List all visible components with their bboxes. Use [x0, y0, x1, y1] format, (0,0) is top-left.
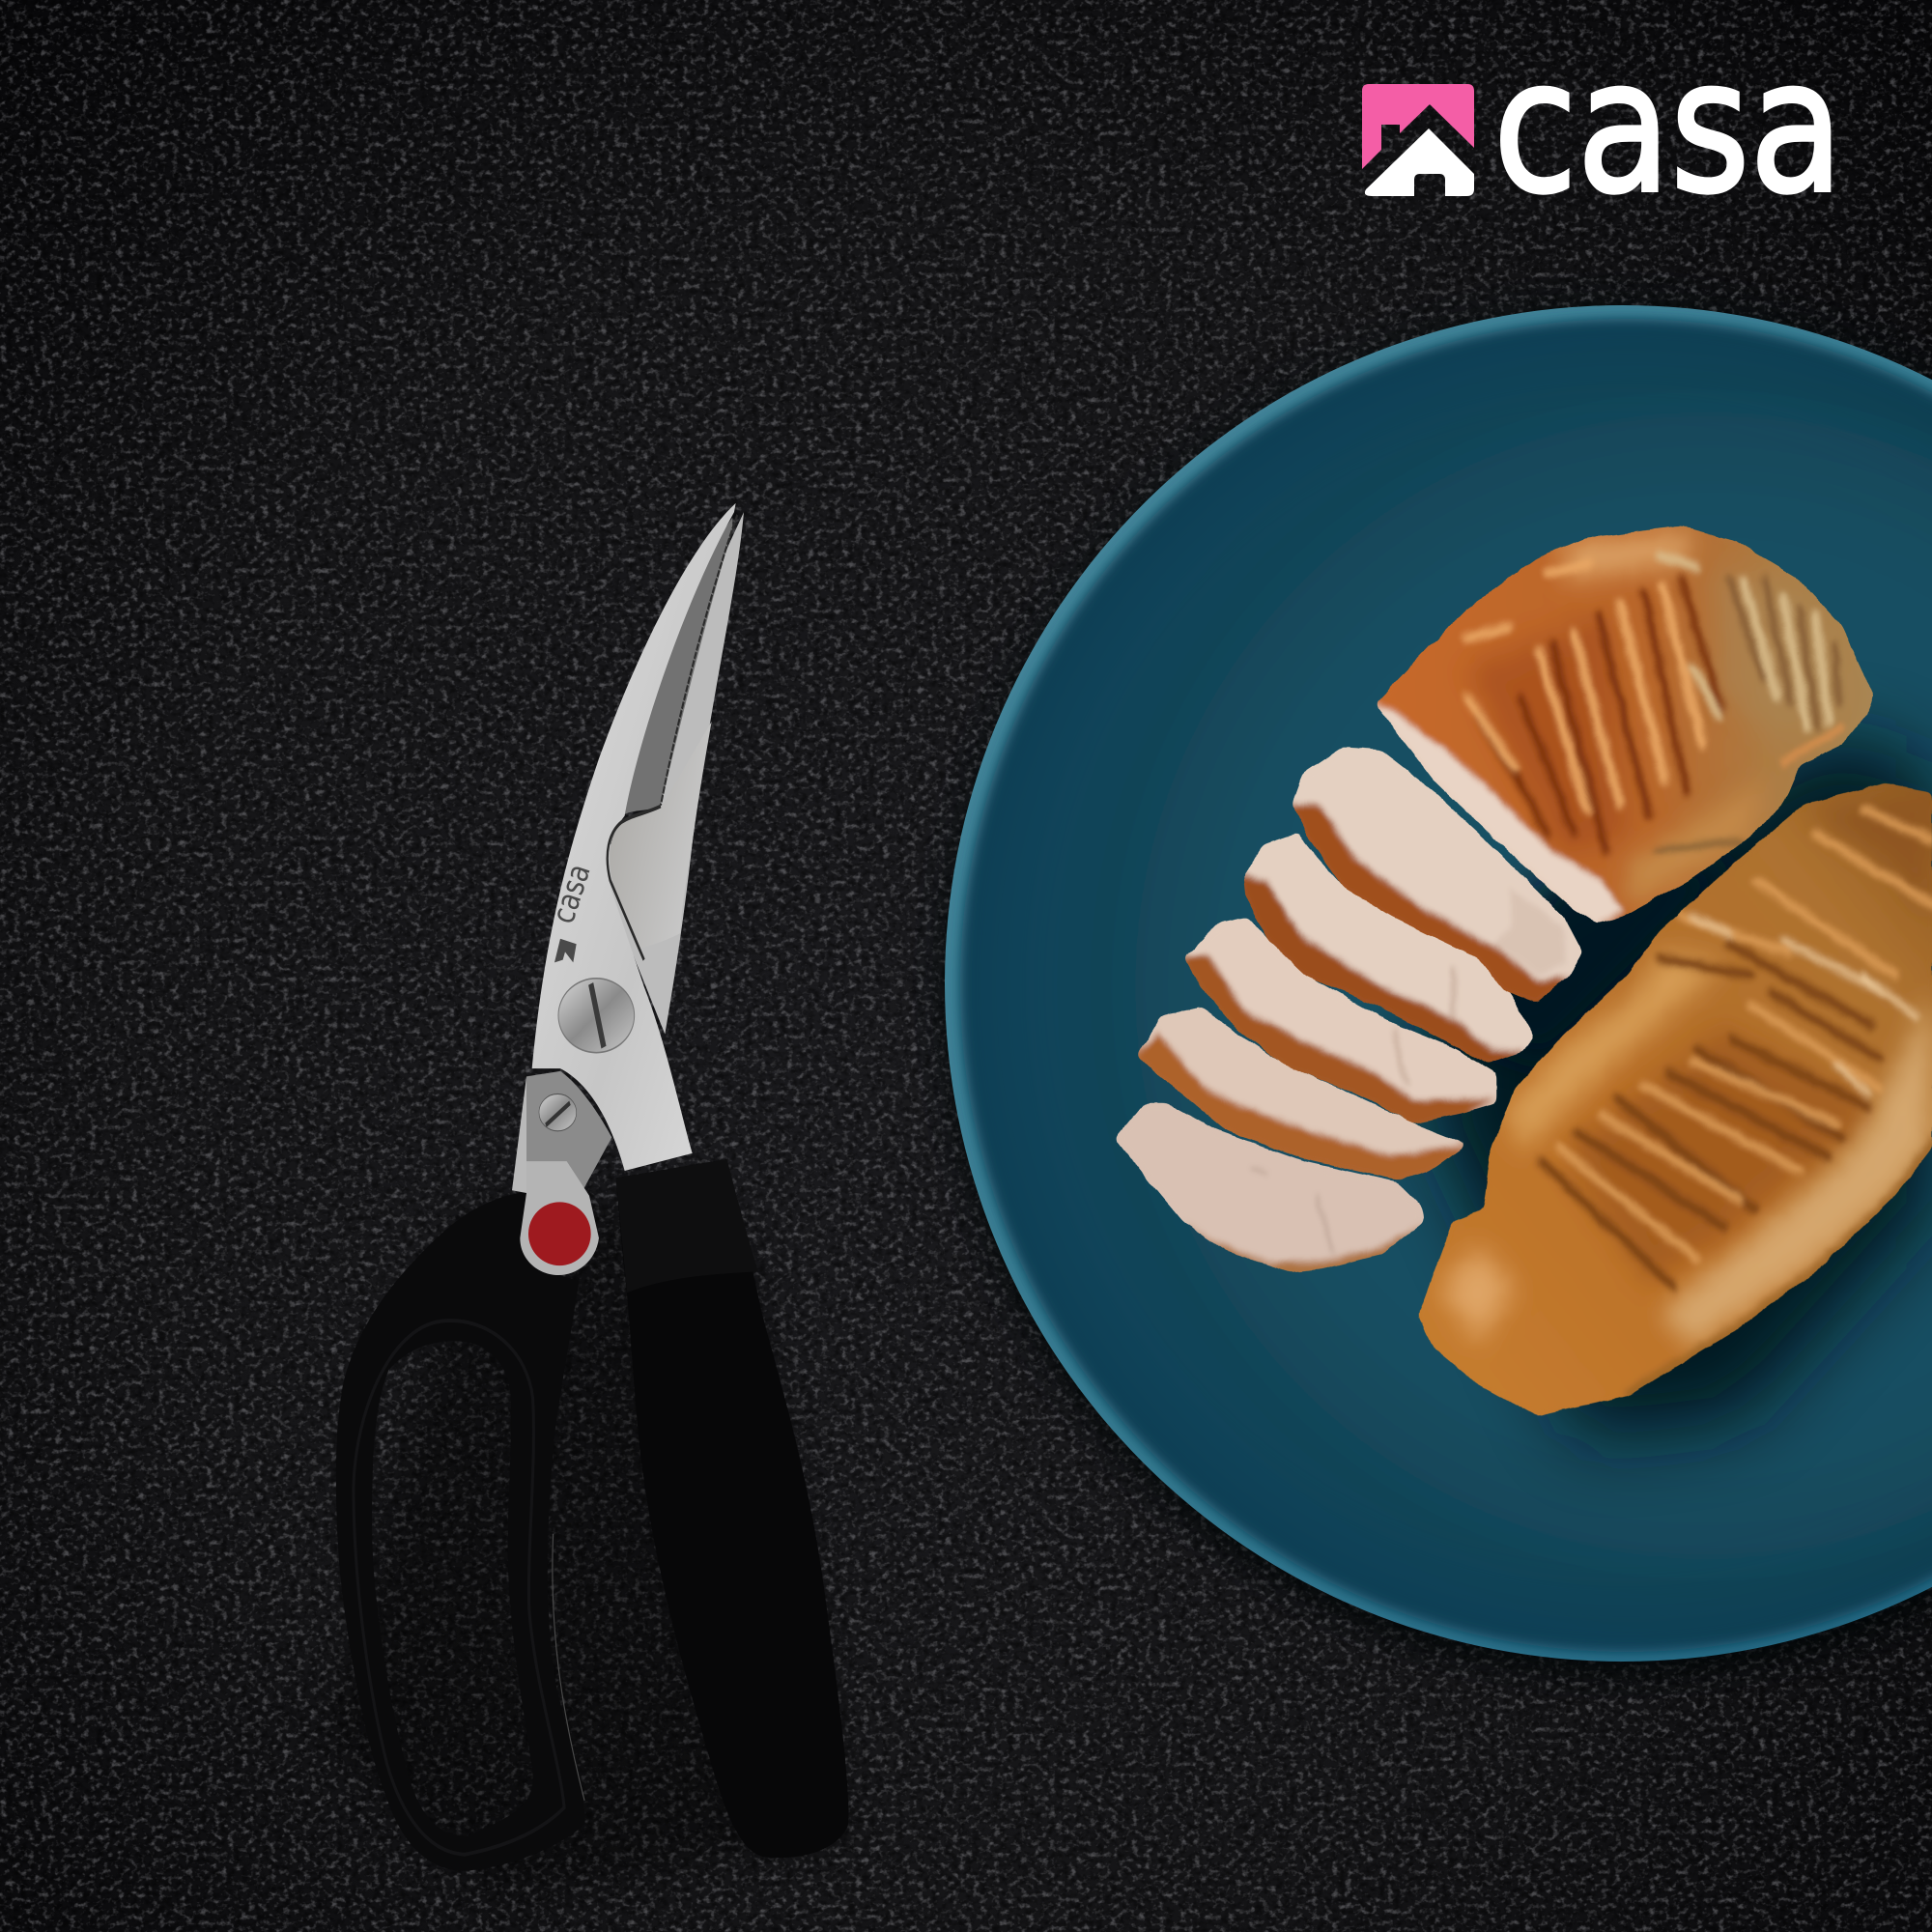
shadow under the chicken [1430, 734, 1932, 1439]
scissors handles [336, 1159, 848, 1871]
sliced chicken pieces [1116, 748, 1582, 1271]
blade logo text: casa [544, 860, 598, 927]
lower blade panel [610, 722, 712, 950]
latch plate [526, 1071, 611, 1190]
slice 3 [1185, 917, 1496, 1123]
plate rim [945, 305, 1932, 1662]
small screw head [539, 1094, 577, 1131]
right solid handle [616, 1159, 848, 1858]
large chicken breast [1418, 783, 1932, 1416]
plate shadow [945, 311, 1932, 1675]
slice 1 [1293, 748, 1582, 1002]
upper skin highlights [1504, 952, 1724, 1153]
slice 2 [1244, 834, 1535, 1064]
logo: casa [1362, 20, 1843, 234]
left handle moulded line [354, 1321, 564, 1855]
back blade [606, 512, 744, 1034]
slice 4 [1137, 1009, 1466, 1179]
logo icon: white house [1365, 128, 1474, 196]
top chicken breast [1376, 526, 1875, 923]
hook outline [608, 807, 661, 960]
red button [528, 1202, 591, 1265]
latch side [512, 1076, 526, 1193]
shadow between meat pieces [1449, 850, 1739, 1063]
scissors [328, 503, 850, 1893]
breast body [1376, 526, 1875, 923]
grill ridges [1466, 532, 1842, 911]
small screw slot [546, 1103, 570, 1125]
pale underside edge [1660, 993, 1932, 1349]
pivot screw slot [591, 983, 604, 1047]
serrated bevel [625, 518, 732, 814]
logo wordmark: casa [1493, 20, 1843, 234]
grill marks [1542, 944, 1880, 1286]
small screw [539, 1094, 577, 1131]
dark grill band [1563, 1029, 1874, 1283]
latch band [520, 1161, 599, 1275]
slice 5 [1116, 1103, 1424, 1271]
main pivot screw [558, 979, 635, 1053]
plate well [960, 319, 1932, 1652]
blade engraving [554, 939, 577, 962]
chicken [1116, 526, 1932, 1416]
lower-left end highlight [1440, 1248, 1515, 1343]
pivot screw head [558, 979, 635, 1053]
right handle collar [616, 1159, 758, 1293]
front blade [532, 503, 736, 1171]
left handle highlight [553, 1534, 584, 1801]
plate [945, 305, 1932, 1675]
plate surface mottling [989, 348, 1932, 1623]
breast cut face [1376, 703, 1622, 923]
serrated cutting edge [661, 515, 737, 805]
dark underside rim [1628, 1141, 1932, 1393]
logo icon: pink roof square [1362, 84, 1474, 169]
scissors blades [512, 503, 744, 1275]
left loop handle [336, 1192, 585, 1871]
large breast body [1418, 783, 1932, 1416]
scissors cast shadow [328, 1200, 850, 1893]
